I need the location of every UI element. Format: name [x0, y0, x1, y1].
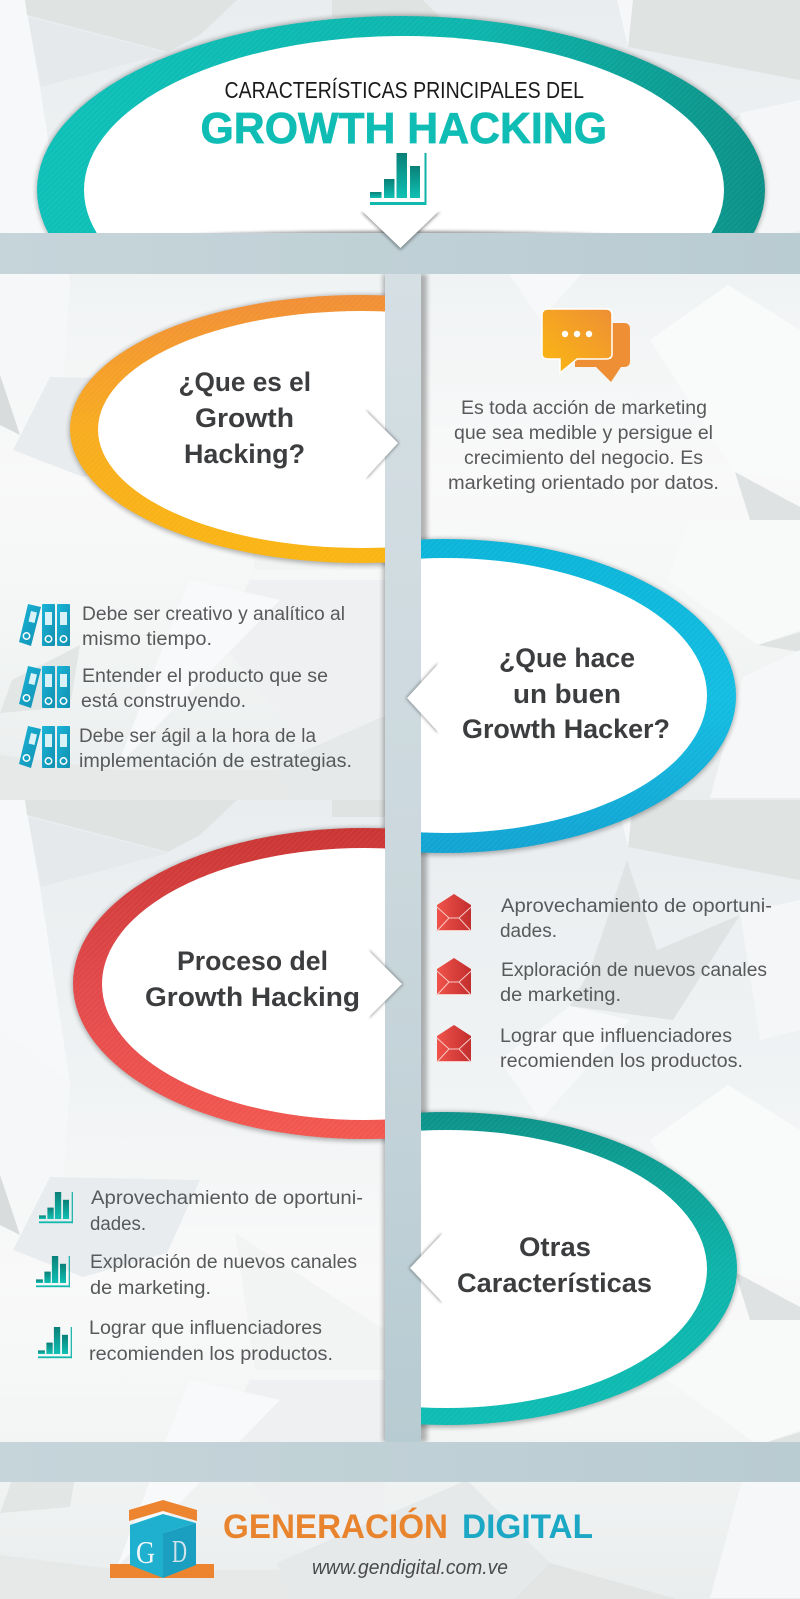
text: aprovechamiento: Aprovechamiento de oportuni-: [91, 1188, 363, 1209]
heading: proceso del growth hacking: [145, 946, 360, 1012]
icon: generacion digital logo: D: [172, 1533, 187, 1569]
text: debe ser agil: Debe ser ágil a la hora de la: [79, 726, 316, 747]
footer brand name: DIGITAL: [462, 1508, 593, 1546]
heading: que es el growth hacking: Growth: [195, 403, 294, 433]
bottom horizontal band: [0, 1442, 800, 1482]
text: aprovechamiento: [500, 896, 772, 942]
footer brand name: [223, 1508, 593, 1546]
text: aprovechamiento: [90, 1188, 363, 1235]
footer url: www.gendigital.com.ve: [312, 1557, 508, 1579]
heading: proceso del growth hacking: Proceso del: [177, 946, 328, 976]
heading: que hace un buen growth hacker: [462, 643, 670, 744]
icon: small chart 2: [36, 1256, 70, 1287]
panel: top header ellipse: [34, 12, 768, 233]
heading: otras caracteristicas: Otras: [519, 1232, 591, 1262]
text: lograr: recomienden los productos.: [89, 1344, 333, 1365]
icon: generacion digital logo: [110, 1500, 214, 1578]
text: entender el producto: está construyendo.: [81, 691, 246, 712]
icon: small chart 3: [38, 1327, 72, 1358]
text: lograr: [89, 1318, 333, 1365]
heading: otras caracteristicas: [457, 1232, 652, 1298]
text: aprovechamiento: dades.: [500, 921, 557, 942]
text: exploracion: [500, 960, 767, 1006]
text: exploracion: Exploración de nuevos canales: [501, 960, 767, 981]
icon: books 2: [19, 666, 70, 708]
text block: definition: que sea medible y persigue el: [454, 423, 713, 444]
text block: definition: marketing orientado por datos.: [448, 473, 719, 494]
arrow: que hace un buen growth hacker: [406, 658, 449, 738]
text block: definition: crecimiento del negocio. Es: [464, 448, 703, 469]
text: entender el producto: Entender el producto que se: [82, 666, 328, 687]
text: lograr: [500, 1026, 743, 1072]
text: exploracion: de marketing.: [90, 1278, 211, 1299]
text: lograr: recomienden los productos.: [500, 1051, 743, 1072]
text: debe ser creativo: Debe ser creativo y analítico al: [82, 604, 345, 625]
panel: otras caracteristicas ring: [421, 1109, 740, 1430]
arrow: proceso del growth hacking: [358, 945, 403, 1023]
icon: chat bubbles: [542, 309, 630, 382]
icon: envelope 2: [437, 958, 471, 995]
title line 1: CARACTERÍSTICAS PRINCIPALES DEL: [224, 77, 584, 103]
heading: otras caracteristicas: Características: [457, 1268, 652, 1298]
title line 2: GROWTH HACKING: [200, 104, 607, 153]
text: entender el producto: [81, 666, 328, 712]
text: exploracion: Exploración de nuevos canales: [90, 1252, 357, 1273]
panel: proceso del growth hacking ring: [70, 825, 385, 1144]
panel: central vertical bar: [383, 274, 427, 1442]
heading: que es el growth hacking: ¿Que es el: [178, 367, 311, 397]
text: exploracion: de marketing.: [500, 985, 621, 1006]
text: debe ser creativo: [82, 604, 345, 650]
top horizontal band: [0, 233, 800, 274]
text: aprovechamiento: dades.: [90, 1214, 146, 1235]
panel: que es el growth hacking ring: [66, 292, 385, 568]
vertical bar body: [385, 274, 421, 1442]
text: debe ser agil: [79, 726, 352, 772]
arrow: header pointing down: [355, 200, 445, 250]
heading: que es el growth hacking: Hacking?: [184, 439, 305, 469]
text: lograr: Lograr que influenciadores: [500, 1026, 732, 1047]
panel: que hace un buen growth hacker ring: [421, 536, 740, 858]
arrow: otras caracteristicas: [409, 1228, 453, 1308]
icon: envelope 1: [437, 894, 471, 931]
text: lograr: Lograr que influenciadores: [89, 1318, 322, 1339]
icon: header bar chart: [370, 153, 426, 205]
heading: que hace un buen growth hacker: un buen: [513, 679, 621, 709]
heading: que hace un buen growth hacker: ¿Que hace: [499, 643, 635, 673]
text block: definition: Es toda acción de marketing: [461, 398, 707, 419]
text: exploracion: [90, 1252, 357, 1299]
heading: que hace un buen growth hacker: Growth Hacker?: [462, 714, 670, 744]
heading: proceso del growth hacking: Growth Hacking: [145, 982, 360, 1012]
icon: books 1: [19, 604, 70, 646]
heading: que es el growth hacking: [178, 367, 311, 469]
footer brand name: GENERACIÓN: [223, 1508, 448, 1546]
text: aprovechamiento: Aprovechamiento de oportuni-: [501, 896, 772, 917]
text: debe ser agil: implementación de estrategias.: [79, 751, 352, 772]
title: [200, 77, 607, 153]
icon: generacion digital logo: G: [136, 1534, 155, 1570]
icon: books 3: [19, 726, 70, 768]
text block: definition: [448, 398, 719, 494]
text: debe ser creativo: mismo tiempo.: [82, 629, 212, 650]
icon: envelope 3: [437, 1025, 471, 1062]
arrow: que es el growth hacking: [355, 405, 399, 484]
icon: small chart 1: [39, 1192, 73, 1223]
